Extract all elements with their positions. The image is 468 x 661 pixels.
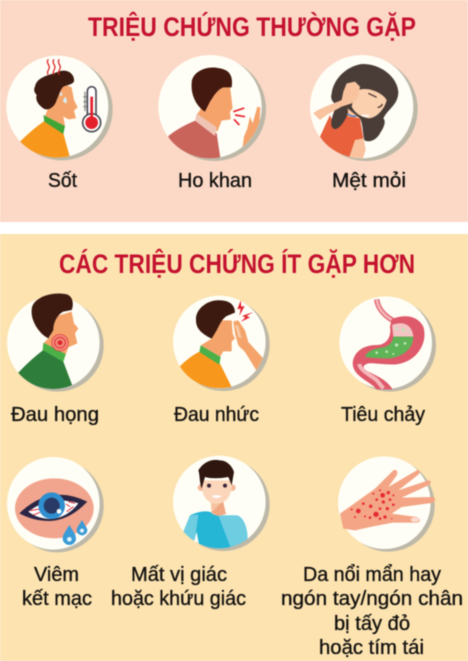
label: rash and discoloured fingers or toes: bị tấy đỏ [334, 613, 410, 635]
label: rash and discoloured fingers or toes: Da nổi mẩn hay [303, 564, 441, 586]
icon: loss of taste or smell [173, 456, 270, 551]
label: Viêm kết mạc: kết mạc [22, 588, 92, 610]
label: Sốt: Sốt [48, 170, 77, 192]
label: Viêm kết mạc [22, 564, 92, 610]
icon: conjunctivitis eye [7, 457, 104, 552]
label: Mất vị giác hoặc khứu giác: Mất vị giác [131, 564, 227, 586]
icon: cough [158, 55, 266, 161]
title: common symptoms: TRIỆU CHỨNG THƯỜNG GẶP [88, 11, 416, 42]
label: rash and discoloured fingers or toes [281, 564, 463, 659]
icon: fatigue [310, 55, 418, 161]
label: Viêm kết mạc: Viêm [34, 564, 79, 586]
label: Ho khan: Ho khan [178, 170, 252, 192]
panel: common symptoms background [0, 0, 468, 222]
label: Đau nhức: Đau nhức [174, 404, 259, 426]
label: rash and discoloured fingers or toes: ngón tay/ngón chân [281, 588, 463, 610]
label: Tiêu chảy: Tiêu chảy [341, 404, 425, 426]
icon: fever [6, 56, 113, 160]
icon: rash on hand [338, 456, 435, 552]
icon: stomach [339, 296, 436, 392]
icon: aches [173, 296, 270, 391]
icon: sore throat [7, 294, 104, 392]
label: Mất vị giác hoặc khứu giác: hoặc khứu giác [111, 588, 246, 610]
label: Mệt mỏi: Mệt mỏi [332, 170, 406, 192]
label: rash and discoloured fingers or toes: hoặc tím tái [319, 637, 424, 659]
panel: less common symptoms background [0, 234, 468, 661]
label: Mất vị giác hoặc khứu giác [111, 564, 246, 610]
label: Đau họng: Đau họng [11, 404, 99, 426]
